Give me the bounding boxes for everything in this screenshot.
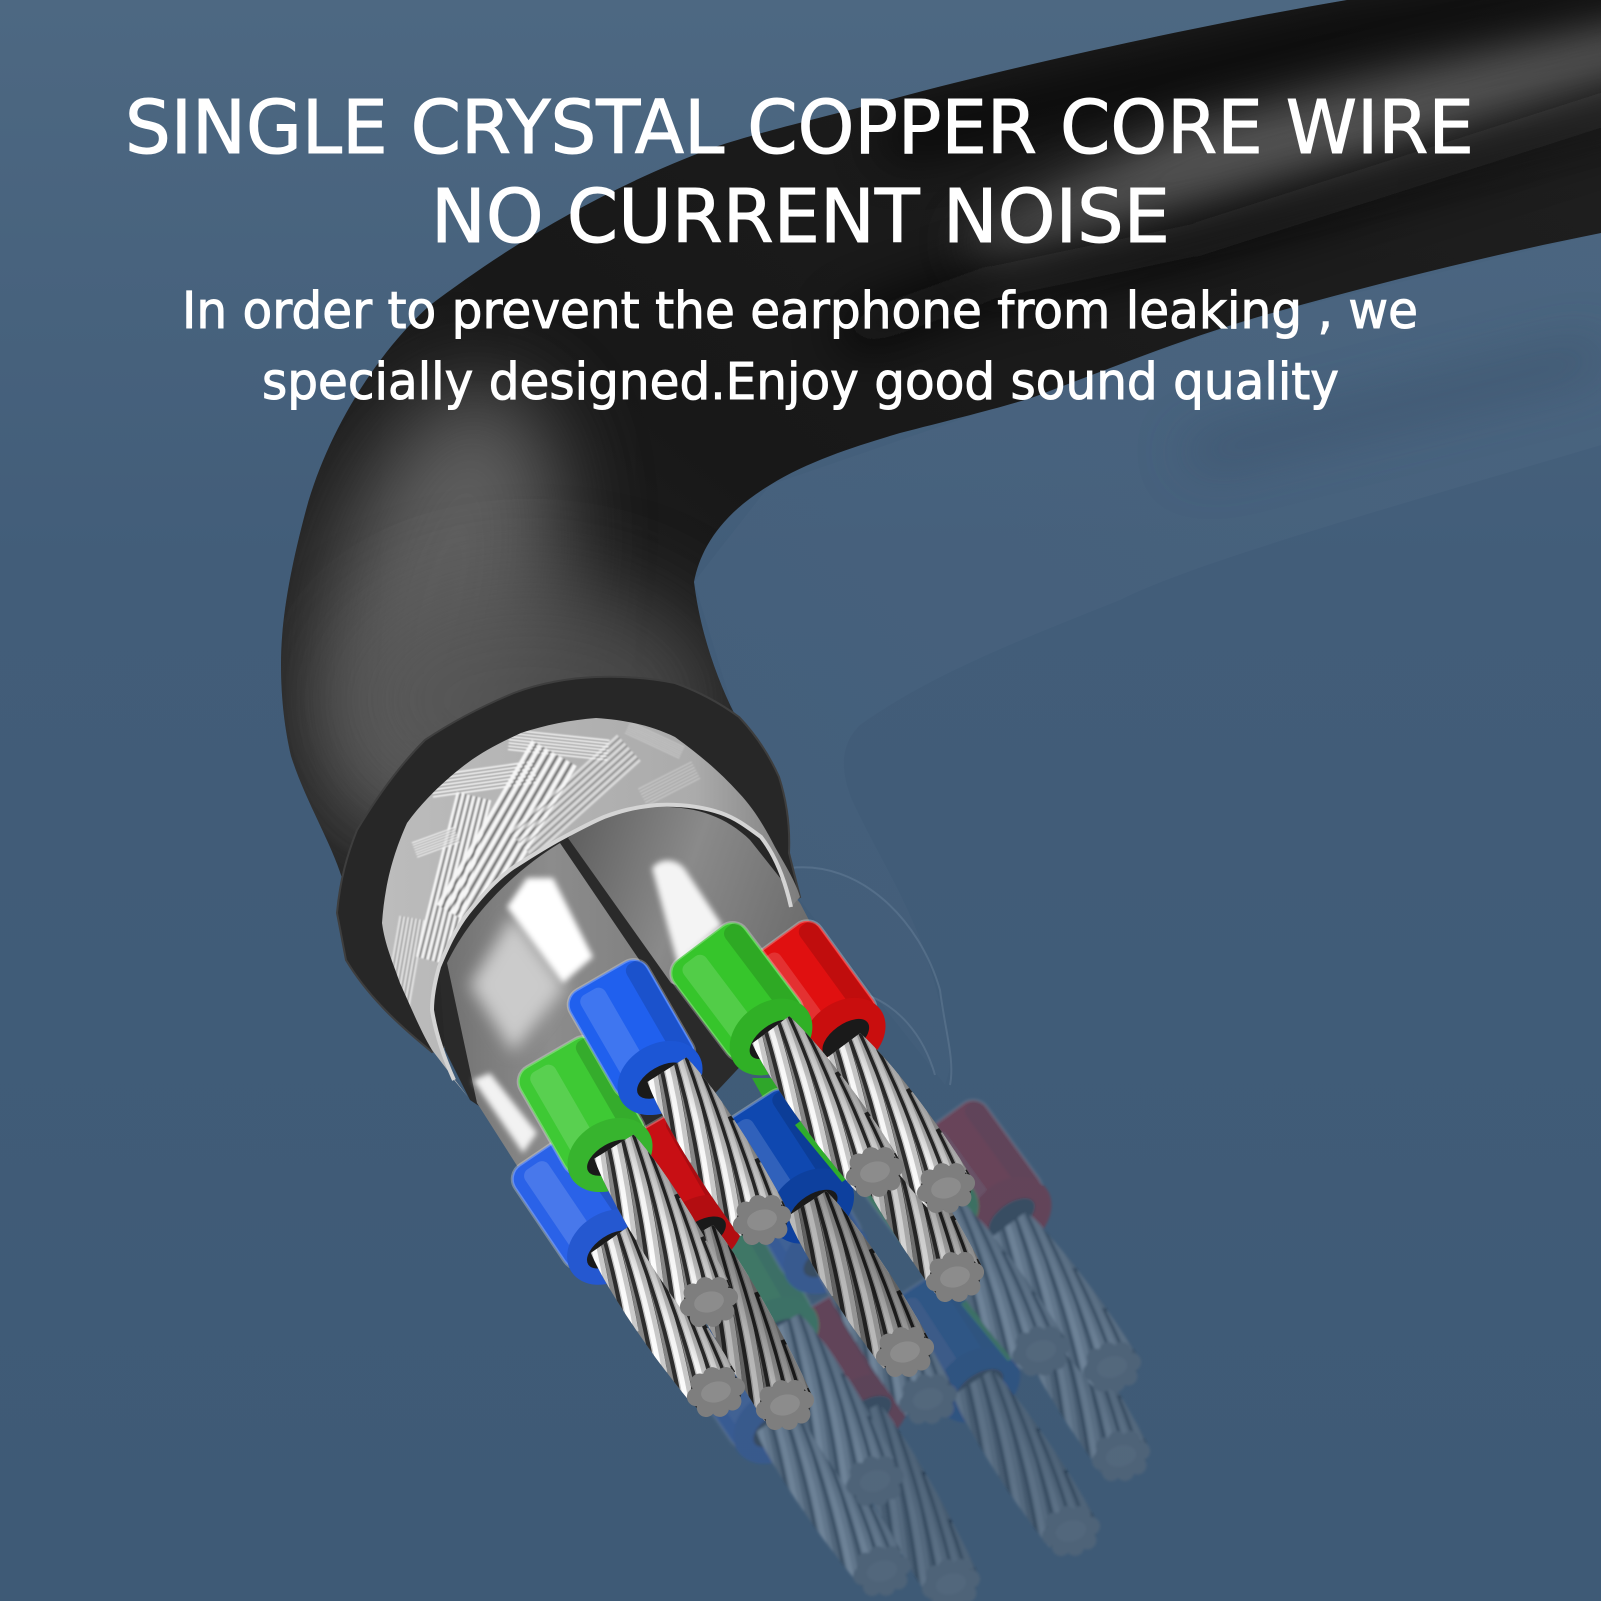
braid lip edge [432, 805, 791, 1080]
ghost reflection of the wire bundle [708, 1098, 1150, 1601]
soft reflection of the cable [694, 233, 1601, 1085]
foil shield braid [378, 718, 800, 1097]
black cable jacket [281, 0, 1601, 876]
rear strand D [542, 1004, 928, 1601]
cut end of jacket [337, 677, 800, 1052]
back strand, hidden behind green and red [713, 917, 1098, 1476]
strand C [451, 1035, 861, 1579]
red sleeve behind front green [602, 1107, 756, 1284]
strand B [465, 936, 846, 1497]
strand A [516, 860, 903, 1418]
dark strand G [652, 996, 1050, 1548]
description text [182, 282, 1418, 412]
description line 1: In order to prevent the earphone from leaking , we [182, 282, 1418, 341]
faint ghost arcs of the shield reflection [790, 867, 951, 1085]
heading line 2: NO CURRENT NOISE [431, 174, 1170, 260]
heading [125, 85, 1474, 260]
darker band inside the reflection [1180, 340, 1601, 470]
blue sleeve C [506, 1124, 665, 1300]
inner dark cavity [439, 813, 840, 1160]
dark blue sleeve and green strip [710, 1078, 868, 1259]
heading line 1: SINGLE CRYSTAL COPPER CORE WIRE [125, 85, 1474, 171]
green sleeve B [512, 1030, 666, 1207]
green strand E [608, 828, 1028, 1365]
red strand F [678, 845, 1100, 1381]
right foil tube [568, 807, 830, 1030]
green sleeve E [664, 916, 827, 1091]
wire bundle [451, 828, 1100, 1601]
description line 2: specially designed.Enjoy good sound quality [262, 353, 1339, 412]
left foil tube [447, 843, 653, 1197]
red sleeve F [738, 914, 900, 1090]
blue sleeve A [562, 953, 716, 1130]
